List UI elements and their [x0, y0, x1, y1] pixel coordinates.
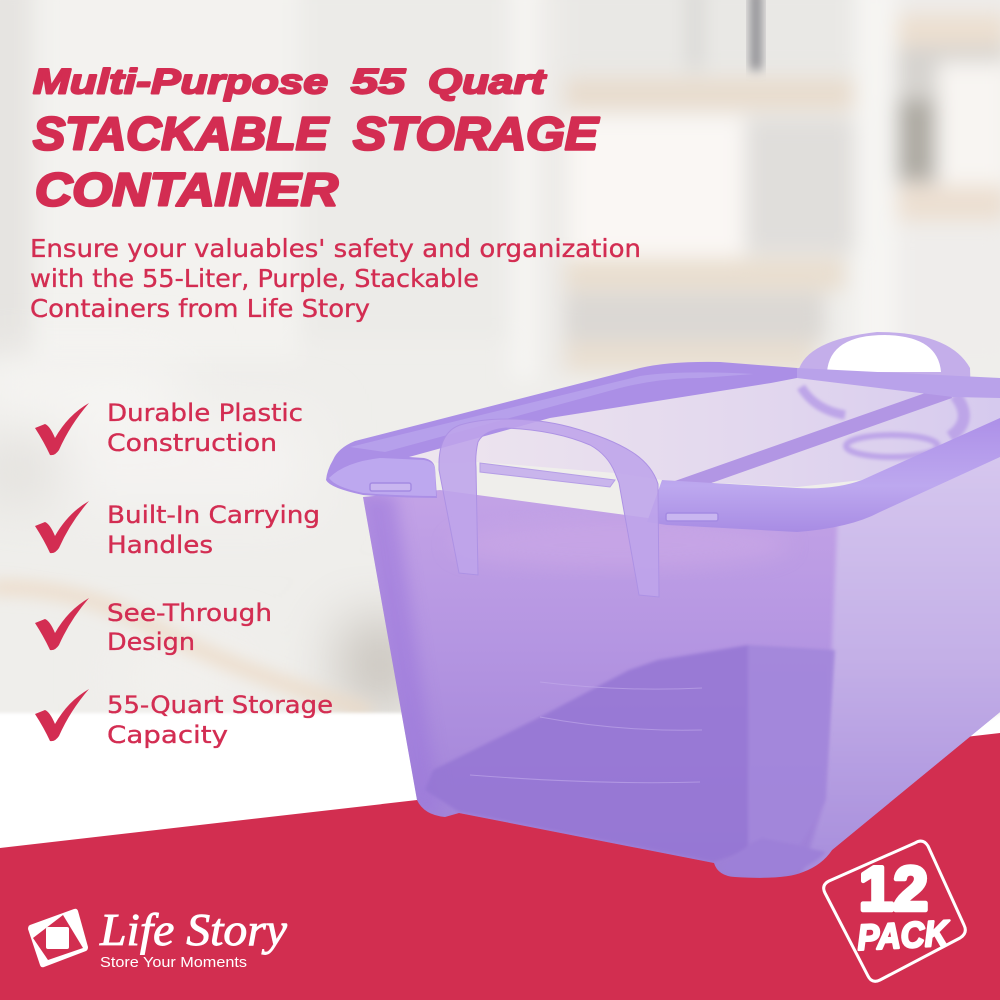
title: CONTAINER	[35, 164, 338, 216]
lid panel	[409, 370, 1000, 487]
description text: with the 55-Liter, Purple, Stackable	[30, 264, 479, 293]
feature: carrying handles: Handles	[107, 531, 213, 559]
feature: carrying handles	[35, 501, 320, 559]
title: Quart	[428, 62, 547, 102]
container body	[363, 440, 1000, 878]
clip slots	[370, 483, 718, 521]
badge: 12 pack	[824, 841, 965, 981]
right strip of rim	[797, 368, 1000, 398]
front rim	[647, 418, 1000, 532]
inner floor shade	[425, 645, 835, 862]
back handle	[798, 332, 972, 452]
rim highlight	[350, 372, 754, 452]
title: 55	[351, 62, 406, 102]
handle seen through lid	[801, 387, 964, 457]
red base band	[0, 733, 1000, 1000]
title: STACKABLE	[33, 108, 329, 160]
logo: Life Story: Life Story	[99, 904, 288, 955]
title: STORAGE	[353, 108, 599, 160]
pink glow	[520, 544, 720, 556]
left edge shade	[363, 496, 431, 812]
feature: capacity: Capacity	[107, 721, 228, 749]
feature: durable plastic: Construction	[107, 429, 277, 457]
feature: durable plastic	[35, 399, 303, 457]
corner foot	[752, 849, 824, 878]
description text: Ensure your valuables' safety and organization	[30, 234, 641, 263]
badge: 12 pack: 12	[859, 855, 928, 924]
feature: durable plastic: Durable Plastic	[107, 399, 303, 427]
back and left rim	[326, 362, 797, 498]
latch bar	[480, 463, 615, 487]
front handle	[439, 419, 659, 597]
logo: Life Story: Store Your Moments	[100, 954, 247, 971]
right side face	[800, 430, 1000, 880]
feature: carrying handles: Built-In Carrying	[107, 501, 320, 529]
description text	[30, 234, 641, 323]
product: purple storage container	[326, 332, 1000, 880]
description text: Containers from Life Story	[30, 294, 370, 323]
icon: logo diamond	[28, 909, 88, 967]
feature: see-through: See-Through	[107, 599, 272, 627]
title: Multi-Purpose	[33, 62, 328, 102]
feature: capacity	[35, 689, 333, 749]
badge: 12 pack: PACK	[856, 912, 952, 958]
inner shading of the body	[355, 430, 1000, 880]
feature list	[35, 399, 333, 749]
title	[33, 62, 599, 216]
left corner highlight	[329, 458, 436, 496]
feature: capacity: 55-Quart Storage	[107, 691, 333, 719]
lid seam bar	[672, 385, 952, 487]
logo: Life Story	[28, 904, 288, 971]
feature: see-through: Design	[107, 628, 195, 656]
moulded ribs	[470, 682, 702, 783]
feature: see-through	[35, 598, 272, 656]
